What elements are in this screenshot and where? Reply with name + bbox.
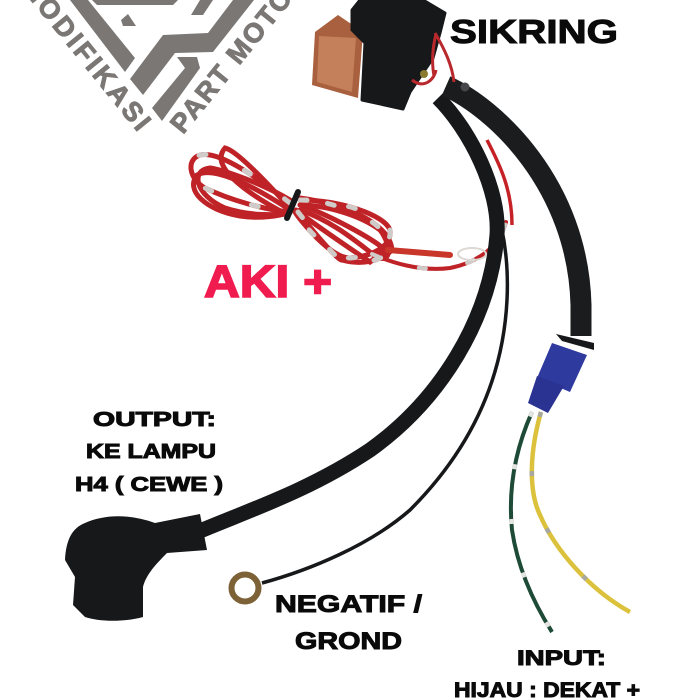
- label: AKI +: AKI +: [204, 256, 332, 307]
- H4 socket boot: [65, 514, 207, 621]
- label: input: [454, 647, 640, 700]
- label: output to H4 lamp: H4 ( CEWE ): [75, 474, 223, 496]
- cable: H4 output harness: [200, 98, 497, 531]
- label: negative ground: GROND: [295, 628, 402, 655]
- wire: red feed along cable: [487, 140, 512, 225]
- blue connector with input wires: [511, 334, 630, 632]
- wire: negative ground lead: [262, 150, 507, 583]
- label: input: INPUT:: [517, 647, 606, 670]
- icon: eyelet ground terminal: [232, 574, 258, 602]
- logo: watermark emblem: [15, 0, 313, 139]
- red wire coil: AKI +: [191, 148, 506, 269]
- label: SIKRING: SIKRING: [450, 13, 618, 50]
- cable: main sheath to connector: [446, 86, 581, 336]
- relay fuse box: [312, 0, 470, 109]
- label: negative ground: [275, 591, 422, 655]
- label: output to H4 lamp: OUTPUT:: [93, 409, 216, 431]
- label: negative ground: NEGATIF /: [275, 591, 422, 618]
- label: output to H4 lamp: KE LAMPU: [86, 441, 216, 463]
- label: output to H4 lamp: [75, 409, 223, 496]
